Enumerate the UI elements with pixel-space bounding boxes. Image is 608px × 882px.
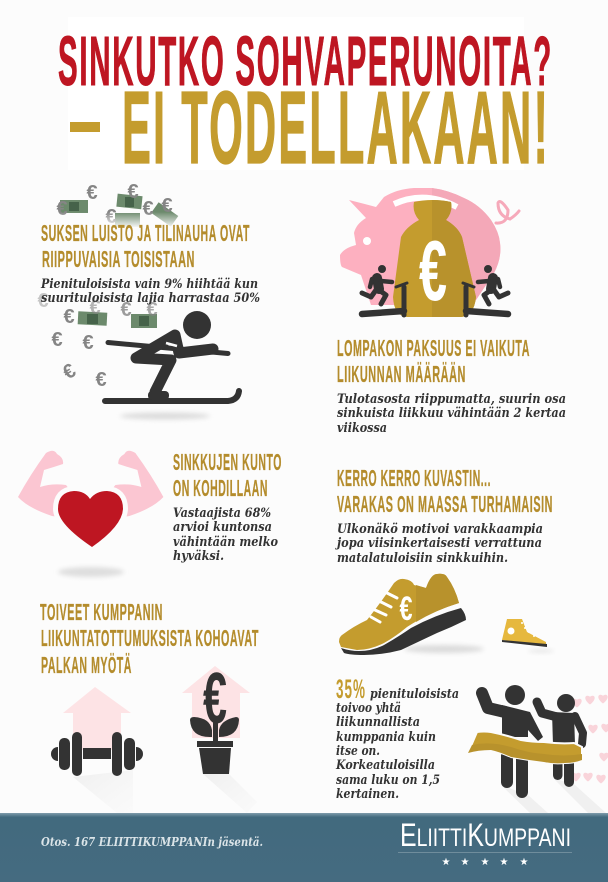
text: mirror: jopa viisinkertaisesti verrattuna (334, 536, 542, 551)
heading: fitness (173, 449, 282, 501)
heading: fitness: ON KOHDILLAAN (173, 475, 268, 501)
icon: flying money (37, 181, 190, 391)
text: fitness: hyväksi. (173, 549, 224, 564)
heading: wallet: LIIKUNNAN MÄÄRÄÄN (337, 361, 466, 387)
text: wallet: sinkuista liikkuu vähintään 2 kertaa (337, 406, 566, 421)
icon: dumbbell with arrow (51, 687, 143, 813)
text: 35 percent (335, 674, 459, 802)
text: 35 percent: 35% (336, 674, 366, 704)
text: fitness: Vastaajista 68% (173, 506, 271, 521)
icon: flying money: € (51, 329, 63, 351)
text: fitness (173, 506, 278, 564)
text: 35 percent: itse on. (336, 744, 380, 759)
text: ski (40, 277, 260, 306)
text: 35 percent: Korkeatuloisilla (335, 758, 435, 773)
heading: ski: RIIPPUVAISIA TOISISTAAN (42, 246, 195, 272)
icon: hearts (571, 695, 608, 784)
treadmill runner right (463, 266, 508, 315)
piggy bank (340, 188, 500, 305)
icon: heart with arms (18, 451, 163, 577)
logo: ★ (520, 857, 529, 868)
icon: piggy bank with money bag and treadmill runners: € (419, 224, 447, 319)
icon: flying money: € (86, 182, 98, 204)
logo: ELIITTIKUMPPANI (400, 817, 571, 853)
text: LIIKUNTATOTTUMUKSISTA KOHOAVAT (41, 625, 259, 651)
text: fitness: arvioi kuntonsa (173, 520, 272, 535)
text: fitness: vähintään melko (173, 535, 278, 550)
heading: partner wishes (40, 599, 259, 678)
icon: flying money: € (105, 206, 117, 228)
text: SUKSEN LUISTO JA TILINAUHA OVAT (41, 220, 250, 246)
icon: flying money: € (161, 195, 173, 217)
text: mirror: matalatuloisiin sinkkuihin. (337, 551, 508, 566)
logo (398, 817, 572, 868)
text: 35 percent: toivoo yhtä (336, 701, 401, 716)
text: 35 percent: sama luku on 1,5 (336, 773, 440, 788)
text: mirror: Ulkonäkö motivoi varakkaampia (337, 522, 543, 537)
title panel (68, 17, 524, 170)
footer band (0, 813, 608, 882)
text: wallet: Tulotasosta riippumatta, suurin osa (337, 392, 566, 407)
title (58, 22, 553, 185)
icon: finish line runners (468, 685, 606, 813)
icon: flying money: € (142, 198, 154, 220)
icon: piggy bank with money bag and treadmill runners (340, 188, 519, 319)
text: wallet (337, 392, 566, 436)
text: SINKKUJEN KUNTO (173, 449, 282, 475)
icon: skier (105, 311, 239, 420)
heading: ski (41, 220, 250, 272)
text: 35 percent: liikunnallista (336, 715, 420, 730)
logo: ★ (461, 857, 470, 868)
icon: euro plant with arrow (182, 659, 257, 813)
pig tail (496, 202, 519, 223)
heading: partner wishes: TOIVEET KUMPPANIN (40, 599, 163, 625)
icon: flying money: € (63, 306, 75, 328)
icon: flying money: € (56, 198, 68, 220)
icon: flying money: € (82, 332, 94, 354)
icon: flying money: € (95, 369, 107, 391)
logo: ★ (500, 857, 509, 868)
heading: partner wishes: PALKAN MYÖTÄ (41, 652, 132, 678)
title dash (70, 122, 100, 132)
icon: small shoe (502, 619, 554, 652)
heading: wallet (337, 335, 530, 387)
icon: large shoe (339, 574, 484, 655)
text: 35 percent: kertainen. (336, 787, 399, 802)
icon: large shoe: € (400, 590, 413, 628)
icon: euro plant with arrow: € (203, 659, 227, 739)
icon: flying money: € (146, 299, 158, 321)
footer note: Otos. 167 ELIITTIKUMPPANIn jäsentä. (41, 834, 263, 849)
logo: ★ (481, 857, 490, 868)
icon: flying money: € (127, 181, 139, 203)
text: 35 percent: kumppania kuin (336, 730, 436, 745)
text: ski: suurituloisista lajia harrastaa 50% (41, 291, 260, 306)
heading: mirror (337, 465, 553, 517)
logo: ★ (442, 857, 451, 868)
text: mirror (334, 522, 543, 566)
treadmill runner left (362, 266, 407, 315)
icon: flying money: € (37, 290, 49, 312)
text: 35 percent: pienituloisista (370, 687, 459, 702)
heart (58, 491, 123, 547)
text: wallet: viikossa (337, 421, 387, 436)
money bag (393, 200, 476, 317)
icon: flying money: € (120, 299, 132, 321)
icon: flying money: € (89, 297, 101, 319)
text: ski: Pienituloisista vain 9% hiihtää kun (40, 277, 258, 292)
icon: flying money: € (59, 360, 80, 384)
